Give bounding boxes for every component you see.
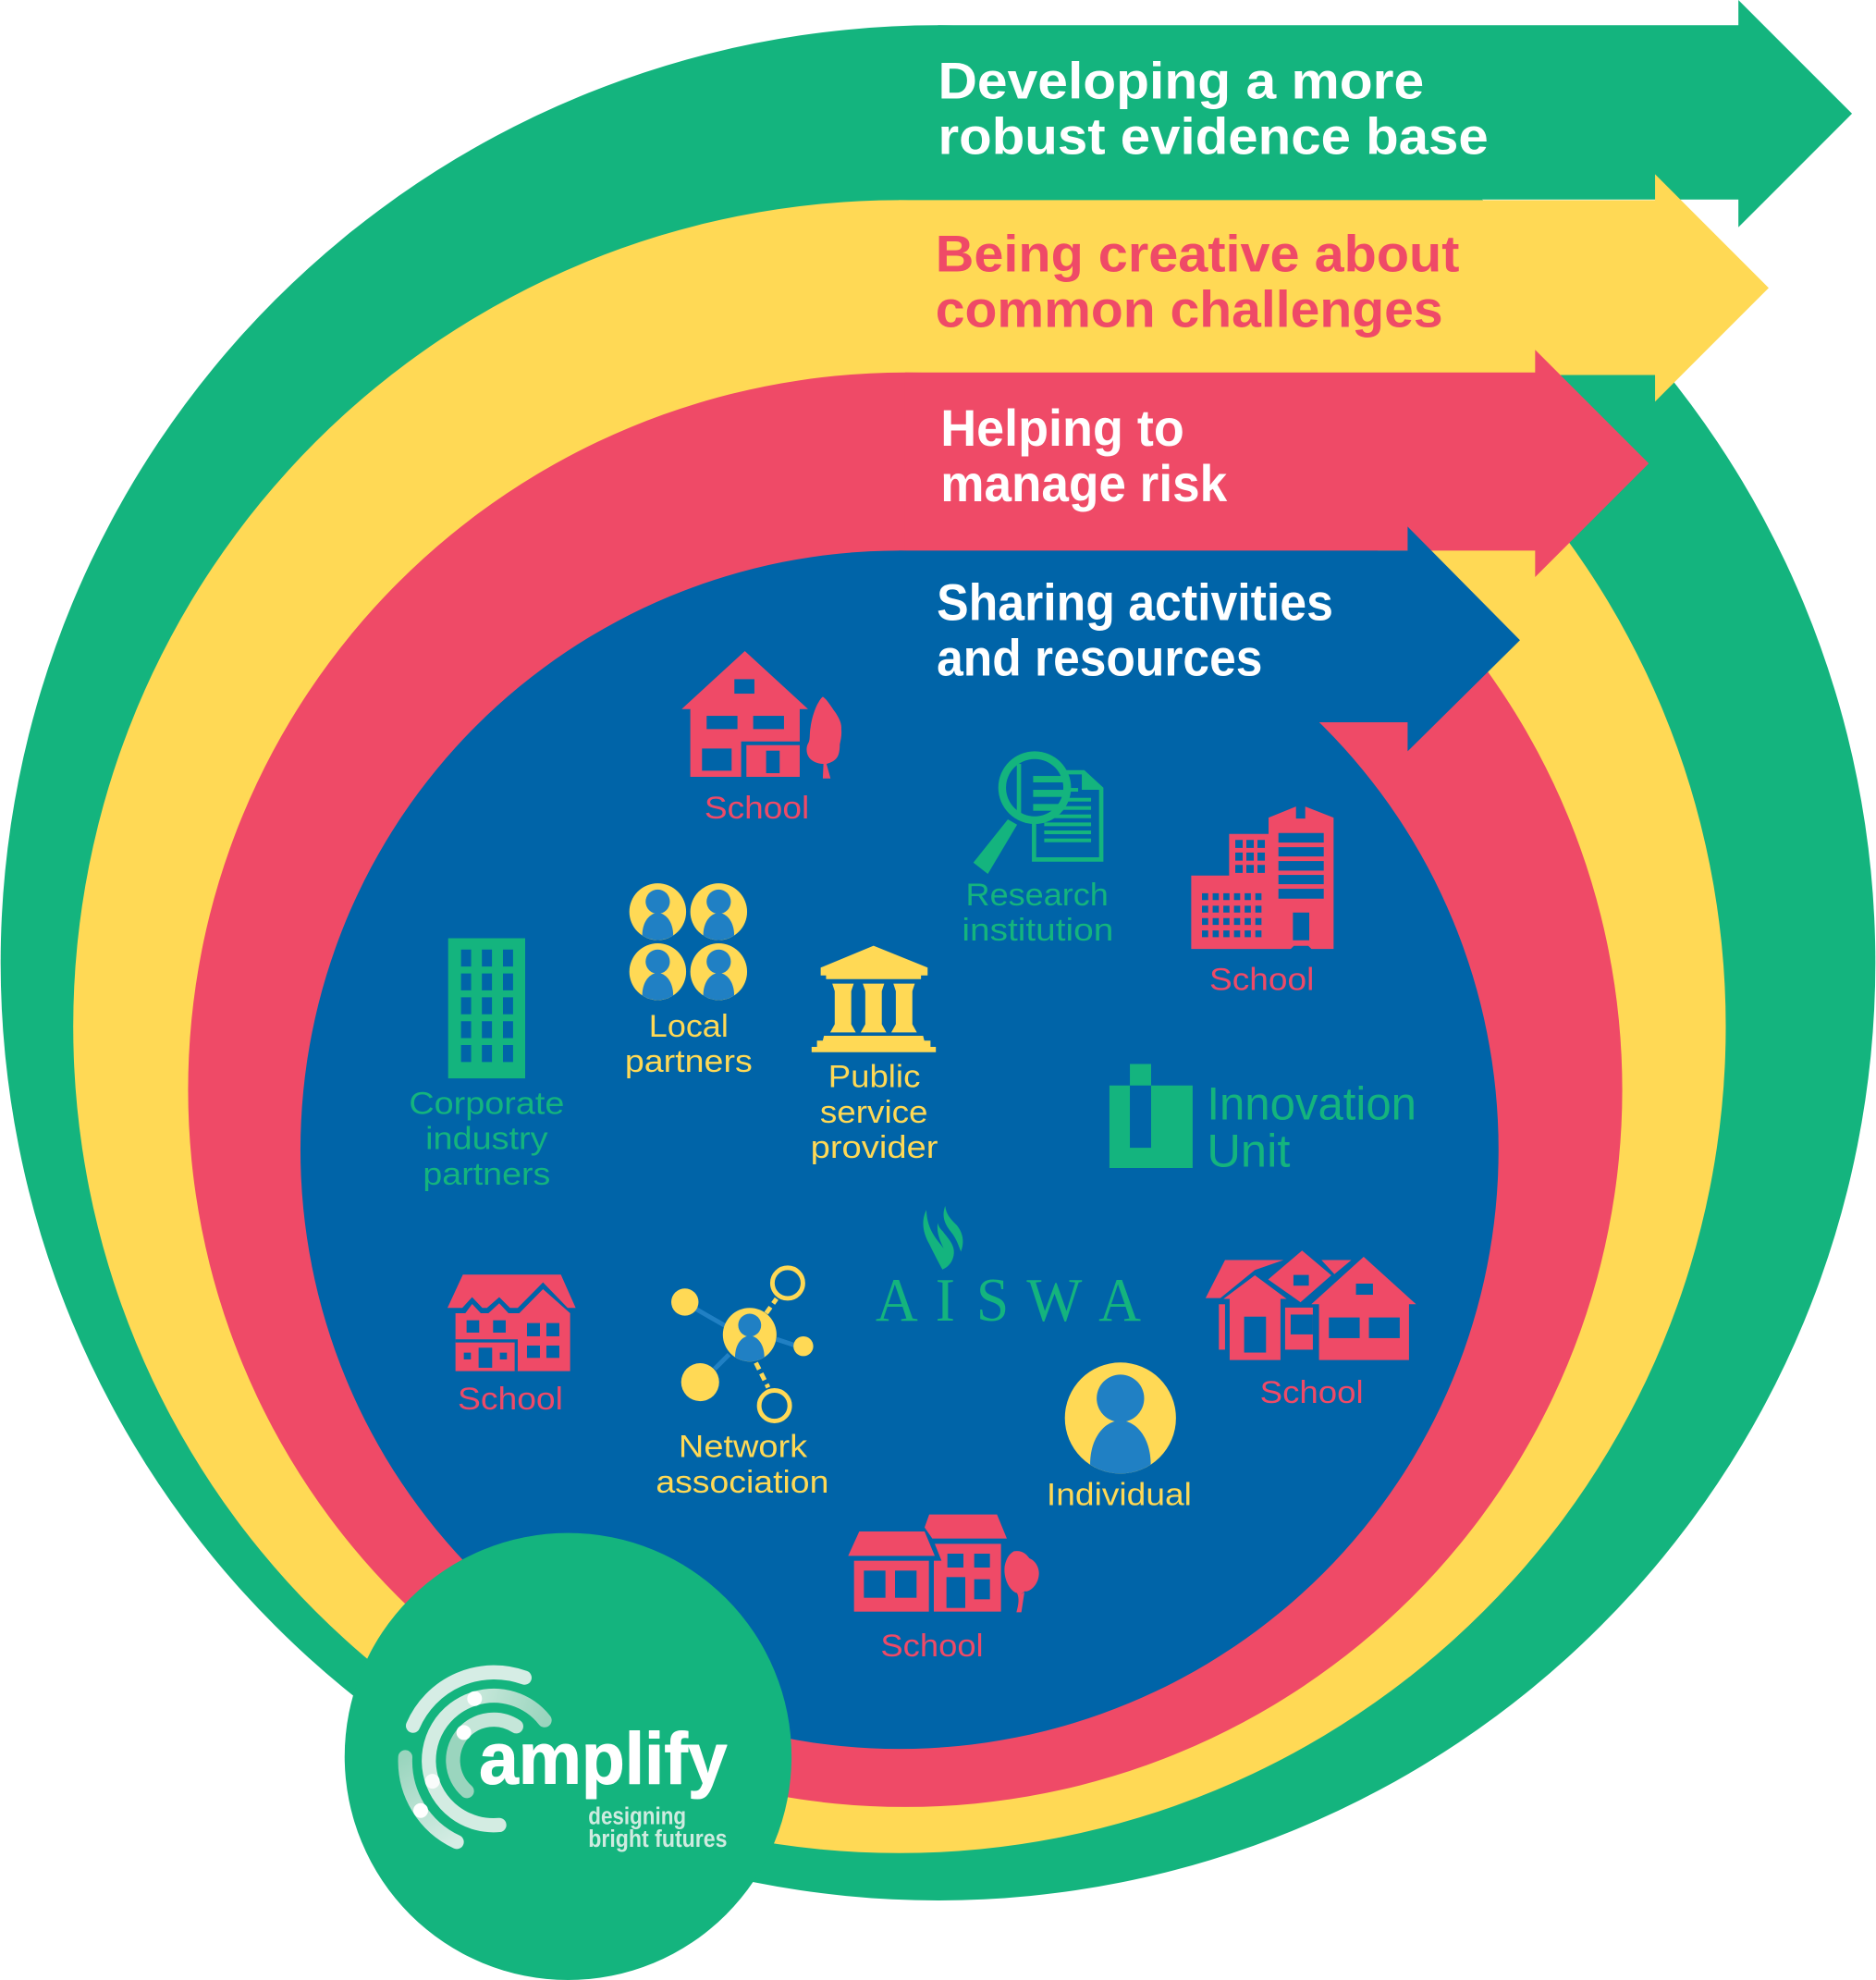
tagline: designing bbox=[588, 1803, 686, 1829]
tagline bbox=[588, 1803, 727, 1852]
label: Research bbox=[966, 878, 1109, 913]
label: School bbox=[880, 1629, 984, 1664]
heading: helping to manage risk: manage risk bbox=[940, 454, 1228, 512]
school: top house with tree bbox=[681, 651, 841, 826]
label: Corporate bbox=[409, 1086, 564, 1121]
icon: signal arcs bbox=[405, 1672, 545, 1842]
label: Public bbox=[828, 1060, 920, 1095]
icon: network nodes bbox=[671, 1268, 814, 1421]
label: School bbox=[705, 791, 809, 826]
label: industry bbox=[425, 1122, 548, 1157]
label bbox=[409, 1086, 564, 1192]
heading: helping to manage risk: Helping to bbox=[940, 399, 1184, 457]
wordmark: Unit bbox=[1207, 1125, 1290, 1177]
icon: tower building bbox=[1191, 806, 1333, 949]
wordmark: amplify bbox=[479, 1717, 727, 1800]
school: cluster of houses bbox=[1206, 1250, 1416, 1410]
heading: being creative about common challenges: common challenges bbox=[936, 280, 1443, 338]
icon: long building bbox=[448, 1274, 576, 1371]
label: partners bbox=[625, 1044, 753, 1079]
label bbox=[656, 1430, 828, 1500]
school: zigzag roof bbox=[448, 1274, 576, 1417]
label: School bbox=[458, 1382, 563, 1417]
heading: being creative about common challenges: Being creative about bbox=[936, 225, 1459, 283]
ring: blue bbox=[300, 526, 1520, 1749]
heading: sharing activities and resources: Sharing activities bbox=[937, 572, 1333, 631]
icon: house and tree bbox=[681, 651, 841, 779]
icon: columned building bbox=[812, 946, 936, 1052]
public service provider bbox=[811, 946, 938, 1165]
school: tower block bbox=[1191, 806, 1333, 998]
tagline: bright futures bbox=[588, 1826, 727, 1852]
label: School bbox=[1209, 962, 1314, 998]
icon: four people bbox=[630, 883, 747, 1000]
label: Local bbox=[649, 1009, 729, 1044]
heading: developing a more robust evidence base: Developing a more bbox=[938, 52, 1424, 110]
wordmark: Innovation bbox=[1207, 1076, 1416, 1129]
heading: sharing activities and resources bbox=[937, 572, 1333, 687]
wordmark: AISWA bbox=[876, 1267, 1141, 1335]
label: institution bbox=[962, 913, 1113, 948]
label: association bbox=[656, 1465, 828, 1500]
aiswa logo bbox=[876, 1206, 1141, 1335]
icon: flame bbox=[923, 1206, 963, 1270]
individual bbox=[1047, 1362, 1192, 1513]
label: partners bbox=[423, 1157, 550, 1192]
local partners bbox=[625, 883, 753, 1079]
icon: magnifier over document bbox=[974, 751, 1103, 874]
research institution bbox=[962, 751, 1113, 948]
corporate industry partners bbox=[409, 939, 564, 1192]
school: two blocks with tree bbox=[848, 1515, 1039, 1664]
wordmark bbox=[1207, 1076, 1416, 1177]
innovation unit logo bbox=[1110, 1064, 1416, 1177]
heading: developing a more robust evidence base bbox=[938, 52, 1489, 166]
label bbox=[811, 1060, 938, 1165]
label: provider bbox=[811, 1130, 938, 1165]
icon: three houses bbox=[1206, 1250, 1416, 1360]
network association bbox=[656, 1268, 828, 1500]
icon: logo mark bbox=[1110, 1064, 1193, 1168]
heading: helping to manage risk bbox=[940, 399, 1228, 512]
label: Network bbox=[679, 1430, 808, 1465]
label bbox=[625, 1009, 753, 1079]
amplify logo badge bbox=[345, 1533, 791, 1980]
heading: developing a more robust evidence base: robust evidence base bbox=[938, 107, 1489, 166]
heading: sharing activities and resources: and resources bbox=[937, 629, 1262, 687]
ring: red bbox=[188, 350, 1649, 1807]
label bbox=[962, 878, 1113, 948]
label: School bbox=[1260, 1375, 1364, 1410]
label: service bbox=[820, 1095, 928, 1130]
label: Individual bbox=[1047, 1478, 1192, 1513]
icon: person bbox=[1065, 1362, 1176, 1473]
ring: yellow bbox=[73, 174, 1769, 1853]
icon: office tower bbox=[448, 939, 525, 1078]
icon: school building and tree bbox=[848, 1515, 1039, 1612]
heading: being creative about common challenges bbox=[936, 225, 1459, 338]
